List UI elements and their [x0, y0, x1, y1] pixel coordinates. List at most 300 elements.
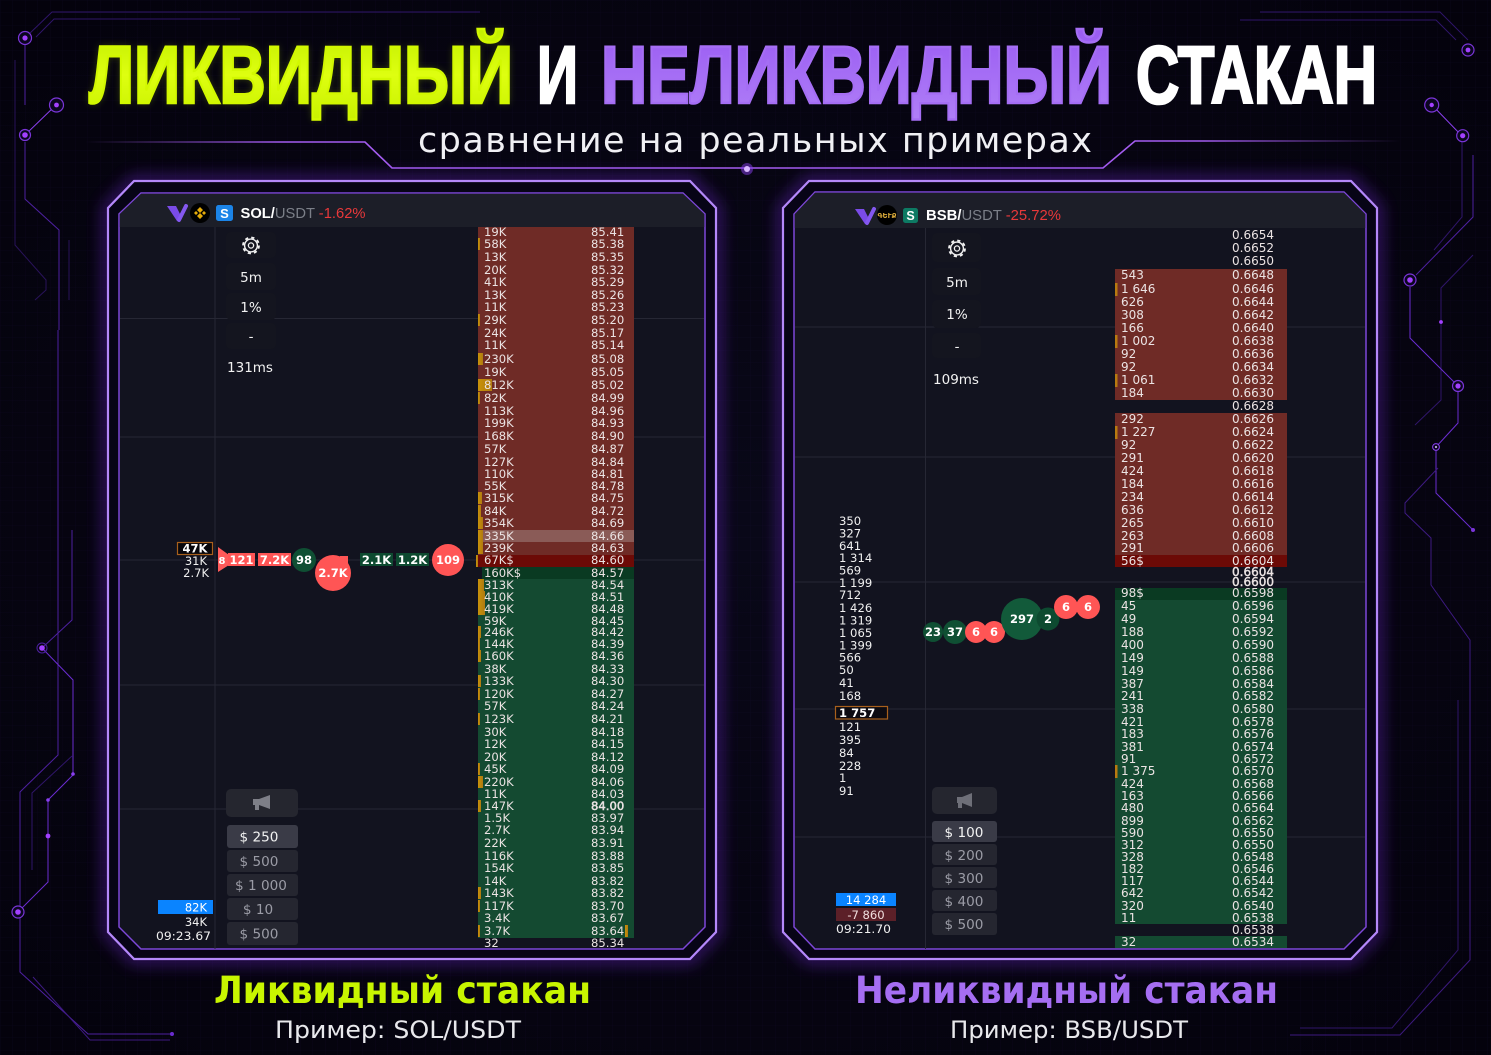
order book values: 83.97	[591, 811, 624, 825]
order book values: 83.67	[591, 911, 624, 925]
order book values: 0.6544	[1232, 874, 1274, 888]
order book values: 120K	[484, 687, 514, 701]
trade bubbles: 6	[972, 625, 980, 639]
circuit nodes: left	[12, 32, 174, 1036]
megaphone button	[932, 787, 997, 814]
order size heat marks	[1115, 283, 1118, 778]
order book values: 84.93	[591, 416, 624, 430]
order book values: 0.6550	[1232, 826, 1274, 840]
order book values: 328	[1121, 850, 1144, 864]
order book values: 312	[1121, 838, 1144, 852]
trade volume column: 1 319	[839, 614, 872, 628]
order book values: 22K	[484, 836, 507, 850]
header band	[120, 194, 704, 227]
order book values: 0.6622	[1232, 438, 1274, 452]
order book values: 0.6572	[1232, 752, 1274, 766]
order book values: 154K	[484, 861, 514, 875]
order book values: 188	[1121, 625, 1144, 639]
panel: liquid order book	[108, 181, 716, 959]
order book values: 49	[1121, 612, 1136, 626]
order book values: 0.6648	[1232, 268, 1274, 282]
title: И	[537, 30, 578, 121]
order book values: 14K	[484, 874, 507, 888]
frame glow and border	[108, 181, 716, 959]
order book values: 20K	[484, 750, 507, 764]
caption: liquid	[214, 969, 591, 1044]
order book values: 11K	[484, 300, 507, 314]
trade volume column: 641	[839, 539, 861, 553]
order book values: 84.45	[591, 614, 624, 628]
amount buttons: $ 300	[945, 871, 983, 887]
order size heat marks	[476, 238, 628, 937]
panel: illiquid order book	[783, 181, 1377, 959]
order book values: 84.12	[591, 750, 624, 764]
order book values: 84.30	[591, 674, 624, 688]
header: logo and ticker: BSB/USDT -25.72%	[926, 208, 1061, 224]
order book values: 2.7K	[484, 823, 510, 837]
order book values: 0.6636	[1232, 347, 1274, 361]
order book values: 98$	[1121, 586, 1144, 600]
order book values: 0.6568	[1232, 777, 1274, 791]
order book values: 0.6604	[1232, 554, 1274, 568]
order book values: 83.82	[591, 874, 624, 888]
trade volume column: 50	[839, 663, 854, 677]
trade bubbles: 2	[1044, 612, 1052, 626]
order book values: 0.6578	[1232, 715, 1274, 729]
caption: illiquid: Пример: BSB/USDT	[950, 1016, 1188, 1044]
order book values: 84.60	[591, 553, 624, 567]
order book values: 84.66	[591, 529, 624, 543]
order book values: 110K	[484, 467, 514, 481]
delta and time: -7 860	[847, 908, 885, 922]
order book values: 0.6590	[1232, 638, 1274, 652]
side controls: -	[955, 339, 960, 355]
trade volume column: 121	[839, 720, 861, 734]
header: logo and ticker: ԳԵՒՔ	[877, 212, 897, 220]
header: logo and ticker: S	[906, 209, 915, 223]
order book values: 812K	[484, 378, 514, 392]
side controls: 1%	[240, 300, 262, 316]
order book values: 57K	[484, 699, 507, 713]
order book values: 13K	[484, 250, 507, 264]
trade bubbles: 109	[436, 553, 460, 567]
delta and time	[836, 893, 896, 936]
trade volume column: 91	[839, 784, 854, 798]
order book values: 84.18	[591, 725, 624, 739]
delta and time: 14 284	[846, 893, 886, 907]
order book values: 127K	[484, 455, 514, 469]
trade bubbles	[923, 595, 1100, 644]
order book values: 246K	[484, 625, 514, 639]
order book values: 85.20	[591, 313, 624, 327]
order book values: 265	[1121, 516, 1144, 530]
order book values: 183	[1121, 727, 1144, 741]
trade volume column: 47K	[183, 542, 209, 556]
order book values: 320	[1121, 899, 1144, 913]
order book values: 160K	[484, 649, 514, 663]
order book values	[1121, 228, 1274, 949]
order book values: 83.91	[591, 836, 624, 850]
order book values: 0.6644	[1232, 295, 1274, 309]
order book values: 335K	[484, 529, 514, 543]
order book values: 0.6610	[1232, 516, 1274, 530]
order book values: 0.6624	[1232, 425, 1274, 439]
grid lines	[120, 227, 704, 949]
trade bubbles: 121	[229, 553, 254, 567]
order book values: 11K	[484, 338, 507, 352]
order book values	[484, 225, 624, 950]
order book values: 0.6630	[1232, 386, 1274, 400]
amount buttons: $ 500	[945, 917, 983, 933]
order book values: 0.6562	[1232, 814, 1274, 828]
caption: illiquid	[855, 969, 1278, 1044]
order book values: 0.6586	[1232, 664, 1274, 678]
order book values: 84.15	[591, 737, 624, 751]
order book values: 85.32	[591, 263, 624, 277]
order book values: 1 227	[1121, 425, 1155, 439]
order book values: 91	[1121, 752, 1136, 766]
trade volume column: 228	[839, 759, 861, 773]
caption: illiquid: Неликвидный стакан	[855, 969, 1278, 1012]
order book values: 38K	[484, 662, 507, 676]
order book values: 113K	[484, 404, 514, 418]
order book values: 20K	[484, 263, 507, 277]
order book values: 92	[1121, 360, 1136, 374]
order book values: 84.96	[591, 404, 624, 418]
order book values: 92	[1121, 438, 1136, 452]
order book values: 147K	[484, 799, 514, 813]
order book values: 85.23	[591, 300, 624, 314]
order book values: 85.41	[591, 225, 624, 239]
order book values: 85.08	[591, 352, 624, 366]
trade bubbles: 8	[219, 556, 226, 567]
order book values: 234	[1121, 490, 1144, 504]
amount buttons	[932, 821, 997, 935]
side controls: 109ms	[933, 372, 979, 388]
trade volume column: 566	[839, 650, 861, 664]
trade volume column: 350	[839, 514, 861, 528]
trade bubbles: 297	[1010, 612, 1034, 626]
order book values: 84.69	[591, 516, 624, 530]
trade bubbles: 37	[947, 625, 963, 639]
trade volume column: 84	[839, 746, 854, 760]
order book values: 84.51	[591, 590, 624, 604]
header: logo and ticker: SOL/USDT -1.62%	[240, 206, 366, 222]
order book values: 0.6574	[1232, 740, 1274, 754]
amount buttons: $ 500	[240, 854, 278, 870]
order book values: 24K	[484, 326, 507, 340]
trade volume column: 1 314	[839, 551, 872, 565]
delta and time	[156, 900, 213, 943]
order book values: 0.6642	[1232, 308, 1274, 322]
side controls	[932, 233, 981, 388]
order book values: 0.6626	[1232, 412, 1274, 426]
trade volume column	[836, 514, 888, 798]
order book values: 239K	[484, 541, 514, 555]
order book values: 163	[1121, 789, 1144, 803]
amount buttons: $ 500	[240, 926, 278, 942]
order book values: 0.6646	[1232, 282, 1274, 296]
order book values: 84.21	[591, 712, 624, 726]
subtitle divider with centre dot	[85, 141, 1400, 175]
order book values: 182	[1121, 862, 1144, 876]
title: НЕЛИКВИДНЫЙ	[601, 29, 1112, 121]
order book values: 0.6576	[1232, 727, 1274, 741]
trade bubbles: 6	[1084, 600, 1092, 614]
trade volume column: 31K	[185, 554, 207, 568]
order book values: 0.6588	[1232, 651, 1274, 665]
order book values: 143K	[484, 886, 514, 900]
order book values: 19K	[484, 365, 507, 379]
order book values: 0.6584	[1232, 677, 1274, 691]
order book values: 133K	[484, 674, 514, 688]
order book values: 387	[1121, 677, 1144, 691]
order book values: 85.35	[591, 250, 624, 264]
side controls: -	[249, 329, 254, 345]
order book values: 291	[1121, 541, 1144, 555]
order book values: 84.84	[591, 455, 624, 469]
order book values: 0.6618	[1232, 464, 1274, 478]
order book values: 419K	[484, 602, 514, 616]
order book values: 0.6604	[1232, 565, 1274, 579]
order book values: 84.54	[591, 578, 624, 592]
order book values: 400	[1121, 638, 1144, 652]
order book values: 0.6640	[1232, 321, 1274, 335]
trade bubbles: 1.2K	[398, 553, 428, 567]
order book values: 83.64	[591, 924, 624, 938]
side controls: 5m	[946, 275, 968, 291]
order book values: 58K	[484, 237, 507, 251]
trade volume column: 1 065	[839, 626, 872, 640]
order book values: 84.09	[591, 762, 624, 776]
header band	[795, 193, 1365, 228]
order book values: 0.6614	[1232, 490, 1274, 504]
trade bubbles: 6	[990, 625, 998, 639]
order book values: 230K	[484, 352, 514, 366]
caption: liquid: Ликвидный стакан	[214, 969, 591, 1012]
caption: liquid: Пример: SOL/USDT	[275, 1016, 521, 1044]
order book values: 1.5K	[484, 811, 510, 825]
order book values: 0.6548	[1232, 850, 1274, 864]
order book values: 381	[1121, 740, 1144, 754]
trade volume column: 712	[839, 588, 861, 602]
subtitle: сравнение на реальных примерах	[418, 121, 1092, 161]
circuit decoration: left	[15, 12, 480, 1040]
order book values: 29K	[484, 313, 507, 327]
amount buttons: $ 10	[243, 902, 273, 918]
order book values: 543	[1121, 268, 1144, 282]
order book values: 84.87	[591, 442, 624, 456]
header: logo and ticker	[855, 205, 1061, 225]
trade volume column: 41	[839, 676, 854, 690]
trade bubbles: 23	[925, 625, 941, 639]
order book values: 0.6652	[1232, 241, 1274, 255]
order book values: 0.6582	[1232, 689, 1274, 703]
order book values: 84.03	[591, 787, 624, 801]
order book values: 57K	[484, 442, 507, 456]
amount buttons: $ 250	[240, 830, 278, 846]
trade bubbles: 2.1K	[362, 553, 392, 567]
title: ЛИКВИДНЫЙ	[89, 29, 513, 121]
order book values: 11K	[484, 787, 507, 801]
order book values: 41K	[484, 275, 507, 289]
order book values: 0.6628	[1232, 399, 1274, 413]
order book values: 83.88	[591, 849, 624, 863]
order book values: 184	[1121, 477, 1144, 491]
order book values: 149	[1121, 651, 1144, 665]
order book values: 0.6566	[1232, 789, 1274, 803]
order book values: 84.99	[591, 391, 624, 405]
order book values: 85.26	[591, 288, 624, 302]
amount buttons: $ 400	[945, 894, 983, 910]
order book values: 85.05	[591, 365, 624, 379]
order book values: 32	[484, 936, 499, 950]
amount buttons: $ 200	[945, 848, 983, 864]
order book values: 160K$	[484, 566, 521, 580]
order book values: 84.75	[591, 491, 624, 505]
order book values: 30K	[484, 725, 507, 739]
order book values: 0.6650	[1232, 254, 1274, 268]
order book values: 0.6638	[1232, 334, 1274, 348]
order book values: 84.81	[591, 467, 624, 481]
order book values: 84.00	[591, 799, 624, 813]
order book values: 83.85	[591, 861, 624, 875]
order book values: 1 646	[1121, 282, 1155, 296]
order book values: 424	[1121, 777, 1144, 791]
order book values: 117K	[484, 899, 514, 913]
order book values: 480	[1121, 801, 1144, 815]
order book values: 85.02	[591, 378, 624, 392]
trade volume column: 569	[839, 564, 861, 578]
circuit decoration: right	[1240, 12, 1473, 1035]
order book values: 84.33	[591, 662, 624, 676]
header: logo and ticker	[167, 203, 366, 223]
order book values: 83.70	[591, 899, 624, 913]
order book values: 45	[1121, 599, 1136, 613]
order book values: 0.6542	[1232, 886, 1274, 900]
order book values: 0.6564	[1232, 801, 1274, 815]
order book values: 1 002	[1121, 334, 1155, 348]
trade volume column: 327	[839, 526, 861, 540]
circuit nodes: right	[1404, 44, 1475, 532]
header: logo and ticker: S	[220, 206, 229, 221]
order book values: 19K	[484, 225, 507, 239]
order book values: 11	[1121, 911, 1136, 925]
order book values: 116K	[484, 849, 514, 863]
order book values: 84.24	[591, 699, 624, 713]
order book values: 184	[1121, 386, 1144, 400]
order book values: 84.06	[591, 775, 624, 789]
order book values: 0.6598	[1232, 586, 1274, 600]
order book values: 85.17	[591, 326, 624, 340]
order book values: 84K	[484, 504, 507, 518]
trade volume column: 1 399	[839, 638, 872, 652]
order book values: 0.6580	[1232, 702, 1274, 716]
order book values: 123K	[484, 712, 514, 726]
order book values: 0.6594	[1232, 612, 1274, 626]
order book bars	[1115, 269, 1287, 948]
order book values: 149	[1121, 664, 1144, 678]
order book values: 313K	[484, 578, 514, 592]
order book values: 1 375	[1121, 764, 1155, 778]
amount buttons: $ 100	[945, 825, 983, 841]
order book values: 85.38	[591, 237, 624, 251]
order book values: 84.72	[591, 504, 624, 518]
order book values: 84.48	[591, 602, 624, 616]
order book values: 0.6616	[1232, 477, 1274, 491]
order book values: 84.27	[591, 687, 624, 701]
amount buttons	[227, 825, 298, 945]
order book values: 0.6620	[1232, 451, 1274, 465]
order book values: 85.14	[591, 338, 624, 352]
order book values: 0.6606	[1232, 541, 1274, 555]
order book values: 144K	[484, 637, 514, 651]
order book values: 424	[1121, 464, 1144, 478]
order book values: 0.6654	[1232, 228, 1274, 242]
order book values: 421	[1121, 715, 1144, 729]
trade volume column: 168	[839, 689, 861, 703]
order book bars	[478, 227, 634, 938]
grid lines	[795, 228, 1365, 949]
order book values: 67K$	[484, 553, 514, 567]
megaphone button	[226, 789, 298, 817]
order book values: 1 061	[1121, 373, 1155, 387]
order book values: 0.6538	[1232, 923, 1274, 937]
order book values: 899	[1121, 814, 1144, 828]
order book values: 166	[1121, 321, 1144, 335]
delta and time: 34K	[185, 915, 207, 929]
order book values: 85.29	[591, 275, 624, 289]
order book values: 55K	[484, 479, 507, 493]
order book values: 117	[1121, 874, 1144, 888]
delta and time: 09:23.67	[156, 929, 211, 943]
trade volume column: 1 426	[839, 601, 872, 615]
order book values: 263	[1121, 529, 1144, 543]
order book values: 291	[1121, 451, 1144, 465]
order book values: 220K	[484, 775, 514, 789]
order book values: 168K	[484, 429, 514, 443]
trade volume column: 2.7K	[183, 566, 209, 580]
trade bubbles: 6	[1062, 600, 1070, 614]
trade volume column: 1 199	[839, 576, 872, 590]
order book values: 32	[1121, 935, 1136, 949]
order book values: 45K	[484, 762, 507, 776]
trade bubbles: 7.2K	[260, 553, 290, 567]
order book values: 0.6538	[1232, 911, 1274, 925]
order book values: 3.4K	[484, 911, 510, 925]
order book values: 56$	[1121, 554, 1144, 568]
order book values: 308	[1121, 308, 1144, 322]
order book values: 0.6534	[1232, 935, 1274, 949]
order book values: 84.39	[591, 637, 624, 651]
order book values: 59K	[484, 614, 507, 628]
order book values: 354K	[484, 516, 514, 530]
order book values: 0.6596	[1232, 599, 1274, 613]
order book values: 626	[1121, 295, 1144, 309]
order book values: 0.6600	[1232, 575, 1274, 589]
order book values: 0.6612	[1232, 503, 1274, 517]
order book values: 84.36	[591, 649, 624, 663]
side controls: 131ms	[227, 360, 273, 376]
order book values: 83.94	[591, 823, 624, 837]
order book values: 0.6570	[1232, 764, 1274, 778]
order book values: 0.6634	[1232, 360, 1274, 374]
order book values: 83.82	[591, 886, 624, 900]
delta and time: 09:21.70	[836, 922, 891, 936]
trade bubbles	[218, 544, 464, 591]
frame glow and border	[783, 181, 1377, 959]
order book values: 0.6540	[1232, 899, 1274, 913]
